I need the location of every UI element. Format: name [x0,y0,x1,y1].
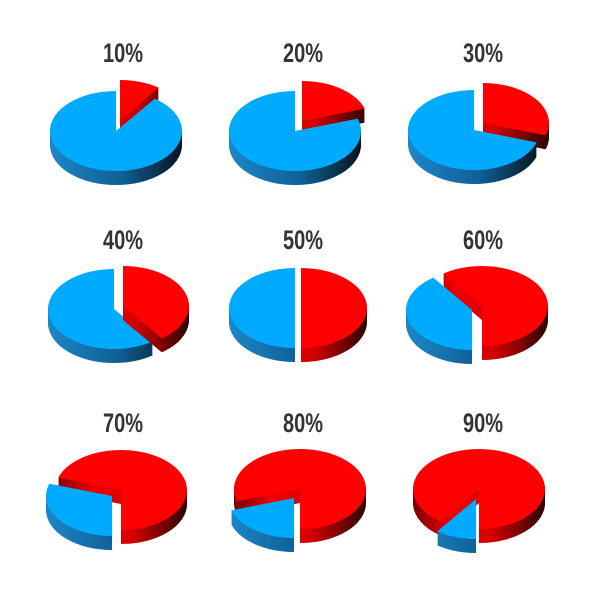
pie 50% [229,268,367,362]
chart: 50% [229,225,367,362]
chart: 40% [48,225,189,363]
label: 50%: 50% [283,225,323,255]
label: 40%: 40% [103,225,143,255]
label: 80%: 80% [283,408,323,438]
pie 60% [406,266,548,364]
pie 10% [50,80,186,185]
label: 90%: 90% [463,408,503,438]
chart: 80% [228,408,366,552]
chart: 90% [410,408,545,553]
chart: 30% [408,38,549,184]
label: 70%: 70% [103,408,143,438]
label: 20%: 20% [283,38,323,68]
pie 70% [46,450,187,550]
label: 10%: 10% [103,38,143,68]
label: 30%: 30% [463,38,503,68]
pie 20% [229,81,368,185]
pie 40% [48,266,189,363]
label: 60%: 60% [463,225,503,255]
chart: 60% [406,225,548,364]
pie 80% [228,449,366,552]
pie 30% [408,83,549,184]
chart: 20% [229,38,368,185]
chart: 10% [50,38,186,185]
pie 90% [410,449,545,553]
chart: 70% [46,408,187,550]
